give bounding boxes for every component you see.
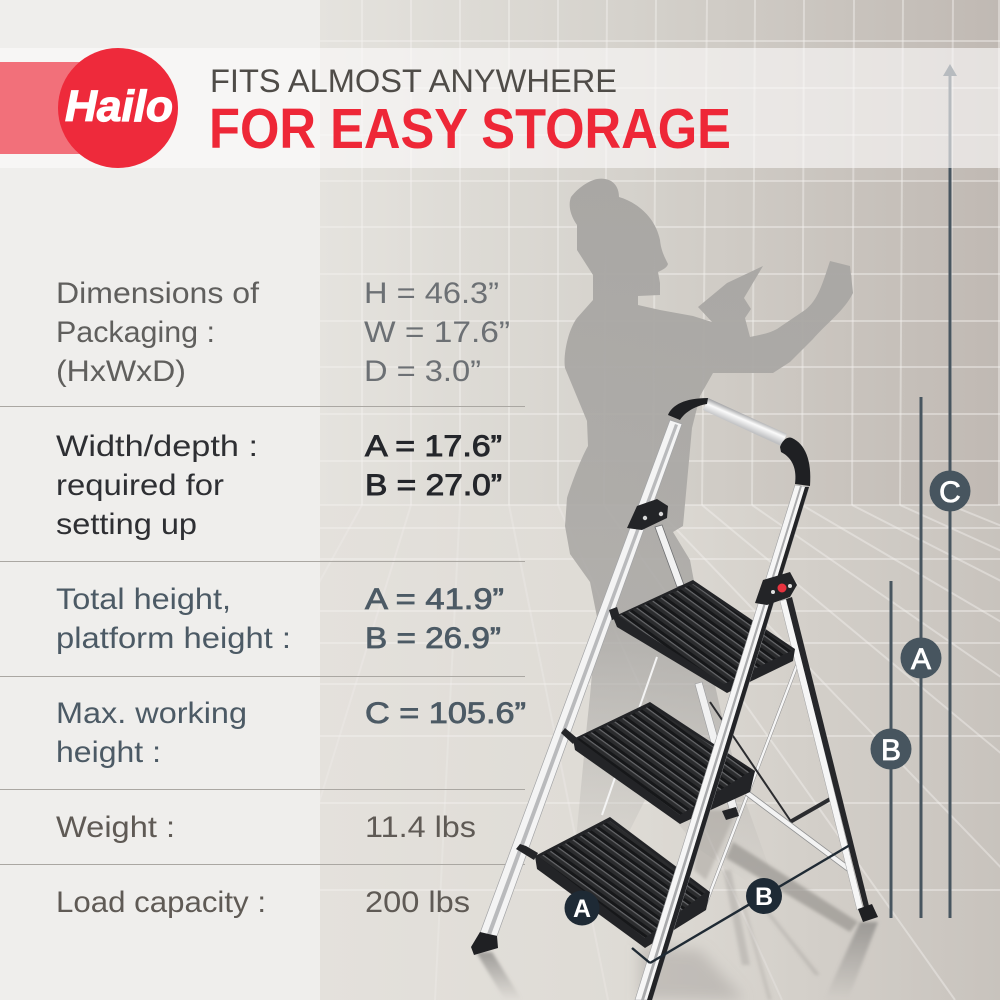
width line A edge bbox=[632, 948, 650, 963]
label circle B: B bbox=[881, 734, 901, 767]
row: dimensions of packaging: (HxWxD) bbox=[56, 355, 186, 388]
label circle A on step bbox=[564, 890, 600, 926]
label circle A: A bbox=[911, 643, 931, 676]
title: FITS ALMOST ANYWHERE bbox=[210, 63, 617, 99]
row: dimensions of packaging: Dimensions of bbox=[56, 277, 260, 310]
row: load capacity: 200 lbs bbox=[365, 886, 470, 919]
label circle A on step: A bbox=[573, 895, 591, 923]
step ladder bbox=[471, 398, 878, 1000]
row: dimensions of packaging: H = 46.3” bbox=[364, 277, 499, 310]
silhouette: woman with drill bbox=[565, 179, 853, 890]
dimension line B bbox=[890, 581, 892, 918]
label circle C: C bbox=[939, 476, 961, 509]
logo: Hailo: Hailo bbox=[65, 82, 173, 131]
row: width and depth: Width/depth : bbox=[56, 430, 258, 463]
row: width and depth bbox=[56, 430, 502, 541]
bottom step bbox=[516, 817, 710, 948]
row: max working height: Max. working bbox=[56, 697, 247, 730]
logo tab bbox=[0, 62, 85, 154]
row: dimensions of packaging: W = 17.6” bbox=[364, 316, 510, 349]
row: max working height: height : bbox=[56, 736, 161, 769]
right hinge with red lock bbox=[755, 572, 797, 605]
row: weight bbox=[56, 811, 476, 844]
row: weight: 11.4 lbs bbox=[365, 811, 476, 844]
row: width and depth: required for bbox=[56, 469, 224, 502]
dimension line C with arrow bbox=[943, 64, 957, 918]
row: total and platform height: Total height, bbox=[56, 583, 231, 616]
rear supports bbox=[602, 525, 850, 906]
top step bbox=[609, 580, 795, 693]
dimension lines bbox=[890, 64, 957, 918]
row: width and depth: setting up bbox=[56, 508, 197, 541]
row: load capacity bbox=[56, 886, 470, 919]
row: width and depth: A = 17.6” bbox=[365, 430, 502, 463]
right handle grip bbox=[780, 438, 810, 486]
row: dimensions of packaging: Packaging : bbox=[56, 316, 215, 349]
left handle grip bbox=[668, 398, 708, 420]
row: load capacity: Load capacity : bbox=[56, 886, 266, 919]
rear leg bbox=[780, 597, 878, 922]
left hinge bbox=[627, 499, 668, 530]
label circle B bbox=[870, 728, 912, 770]
floor shadows of the ladder bbox=[476, 810, 878, 1000]
row: max working height bbox=[56, 697, 526, 769]
dimension line A bbox=[920, 397, 922, 918]
row: dimensions of packaging: D = 3.0” bbox=[364, 355, 481, 388]
label circle A bbox=[900, 638, 942, 678]
label circle C bbox=[930, 470, 970, 512]
logo: Hailo bbox=[58, 48, 178, 168]
row: width and depth: B = 27.0” bbox=[365, 469, 502, 502]
row: weight: Weight : bbox=[56, 811, 175, 844]
title bbox=[209, 63, 731, 161]
left rail bbox=[471, 420, 682, 955]
header banner bbox=[0, 48, 1000, 168]
row: total and platform height: platform height : bbox=[56, 622, 291, 655]
front right rail bbox=[635, 485, 809, 1000]
panel: specification background bbox=[0, 0, 320, 1000]
depth line B bbox=[650, 845, 850, 963]
panel: room scene bbox=[320, 0, 1000, 1000]
label circle B on floor: B bbox=[755, 883, 773, 911]
handle tube bbox=[703, 398, 787, 446]
row: total and platform height: A = 41.9” bbox=[365, 583, 504, 616]
row: total and platform height bbox=[56, 583, 504, 655]
title: FOR EASY STORAGE bbox=[209, 97, 731, 161]
row: max working height: C = 105.6” bbox=[365, 697, 526, 730]
middle step bbox=[561, 702, 755, 824]
row: total and platform height: B = 26.9” bbox=[365, 622, 501, 655]
row: dimensions of packaging bbox=[56, 277, 510, 388]
label circle B on floor bbox=[746, 878, 782, 914]
